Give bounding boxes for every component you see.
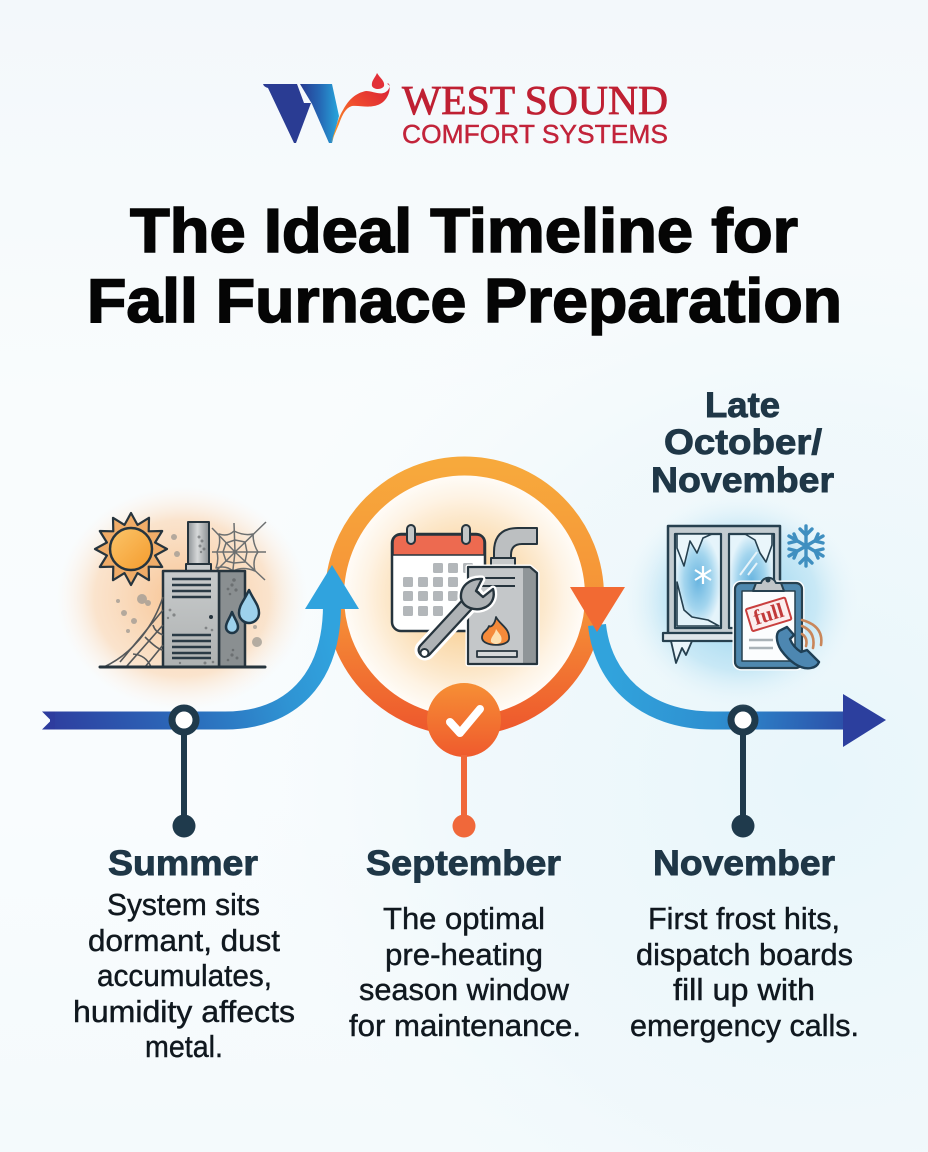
description [73, 887, 295, 1064]
illustration: summer furnace [95, 513, 266, 667]
description: dormant, dust [88, 923, 280, 958]
text block: november [630, 844, 859, 1043]
icon: furnace body [163, 571, 245, 667]
glow: september [340, 472, 588, 720]
description: season window [359, 972, 570, 1007]
description: metal. [145, 1029, 223, 1064]
icon: flue pipe [186, 522, 211, 572]
icon: duct [491, 528, 537, 567]
heading: November [653, 844, 835, 883]
description: First frost hits, [648, 901, 840, 936]
illustration: frosted window and full dispatch board [663, 526, 823, 668]
icon: ringing signal [802, 620, 821, 648]
heading: late october/november: October/ [664, 423, 822, 462]
heading: late october/november: November [651, 461, 834, 500]
logo name: WEST SOUND [402, 77, 668, 123]
icon: snowflake [789, 526, 823, 566]
icon: clipboard [735, 578, 802, 668]
heading: late october/november [651, 386, 834, 500]
logo subtitle: COMFORT SYSTEMS [402, 119, 668, 149]
ring: september cycle [334, 466, 594, 726]
text block: september [349, 844, 581, 1043]
title [87, 197, 842, 336]
logo: West Sound Comfort Systems [263, 73, 668, 149]
icon: cobweb upper right [212, 522, 266, 580]
title: Fall Furnace Preparation [87, 267, 842, 336]
check badge [427, 683, 501, 757]
stamp: full: full [750, 598, 787, 630]
description [630, 901, 859, 1043]
description: The optimal [383, 901, 545, 936]
illustration: calendar, wrench and furnace [392, 525, 537, 664]
heading: late october/november: Late [705, 386, 780, 425]
glow: november [622, 492, 858, 708]
heading: September [366, 844, 561, 883]
icon: calendar [392, 525, 485, 631]
marker: september [452, 755, 476, 838]
icon: wrench [420, 579, 494, 657]
ground line [100, 666, 265, 668]
description: fill up with [673, 972, 815, 1007]
description: pre-heating [385, 937, 543, 972]
icon: furnace with flame [468, 567, 537, 664]
text block: summer [73, 844, 295, 1064]
icon: window [663, 526, 780, 663]
description: emergency calls. [630, 1008, 859, 1043]
description: for maintenance. [349, 1008, 581, 1043]
timeline arrow: left rising segment [42, 565, 359, 730]
glow: summer [57, 486, 307, 710]
icon: W mark with flame [263, 73, 390, 143]
icon: cobweb lower left [104, 597, 163, 667]
timeline arrow: right descending segment [597, 625, 886, 747]
icon: water drops [226, 590, 259, 633]
marker: november [731, 708, 755, 838]
description: accumulates, [97, 958, 272, 993]
marker: summer [172, 708, 196, 838]
description: humidity affects [73, 994, 295, 1029]
heading: Summer [108, 844, 258, 883]
description: dispatch boards [636, 937, 853, 972]
icon: sun [95, 513, 167, 585]
description [349, 901, 581, 1043]
icon: dust specks [116, 534, 262, 647]
icon: phone [777, 627, 819, 668]
description: System sits [107, 887, 260, 922]
title: The Ideal Timeline for [130, 197, 798, 266]
arrowhead: orange ring arrow [570, 587, 625, 632]
